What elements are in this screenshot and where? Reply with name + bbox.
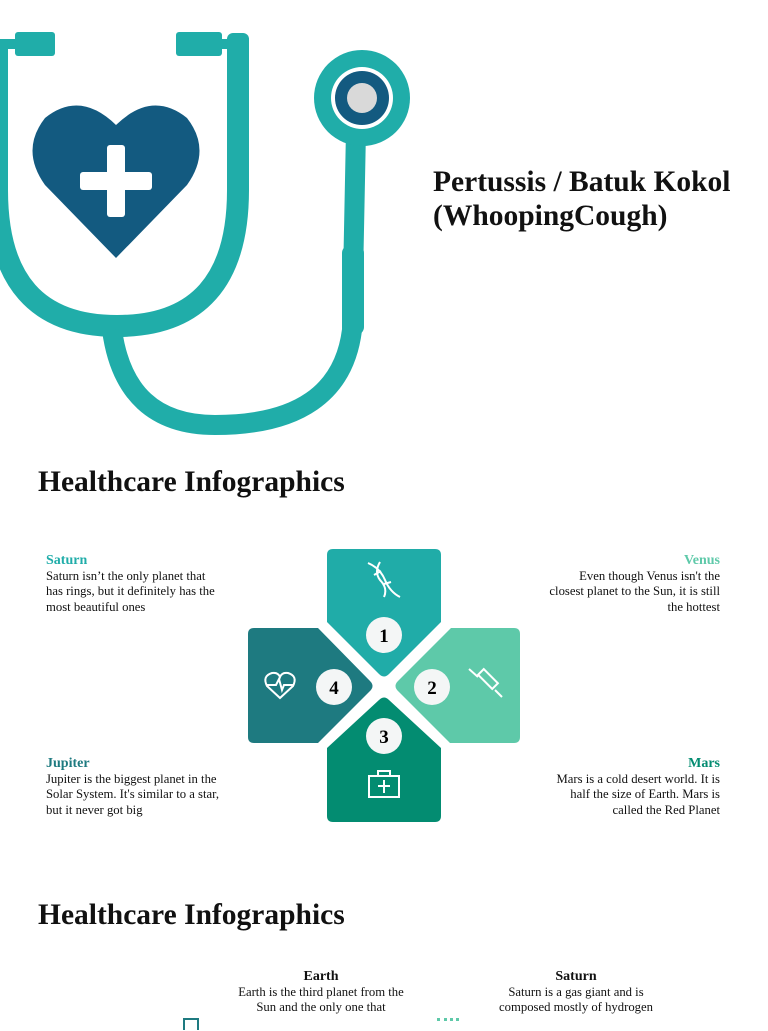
- text block: Saturn 2: Saturn: [555, 969, 597, 984]
- tile 3: 3: [379, 727, 389, 748]
- tile 4: [248, 628, 372, 743]
- text block: Mars: Mars is a cold desert world. It is: [556, 772, 720, 786]
- text block: Venus: Venus: [684, 553, 720, 568]
- text block: Jupiter: Solar System. It's similar to a star,: [46, 787, 219, 801]
- icon: partial right: [437, 1018, 459, 1031]
- text block: Earth: Earth is the third planet from the: [238, 984, 404, 998]
- text block: Mars: half the size of Earth. Mars is: [570, 787, 720, 801]
- text block: Saturn 2: [499, 969, 653, 1014]
- title: Pertussis / Batuk Kokol: [433, 166, 731, 198]
- diagram: four-part cross: [248, 549, 520, 822]
- icon: partial left: [183, 1018, 199, 1030]
- text block: Saturn: Saturn: [46, 553, 87, 568]
- tile 3: [327, 698, 441, 822]
- text block: Jupiter: Jupiter: [46, 756, 90, 771]
- text block: Saturn: Saturn isn’t the only planet that: [46, 568, 205, 582]
- heading 2: Healthcare Infographics: [38, 899, 345, 931]
- text block: Earth: Sun and the only one that: [256, 1000, 386, 1014]
- title: [433, 166, 731, 232]
- text block: Jupiter: Jupiter is the biggest planet in the: [46, 772, 217, 786]
- title: (WhoopingCough): [433, 200, 667, 232]
- text block: Saturn: has rings, but it definitely has the: [46, 584, 215, 598]
- text block: Jupiter: but it never got big: [46, 802, 143, 816]
- text block: Venus: the hottest: [667, 600, 720, 614]
- text block: Venus: Even though Venus isn't the: [579, 568, 720, 582]
- text block: Mars: Mars: [688, 756, 720, 771]
- tile 2: 2: [427, 678, 437, 699]
- illustration: stethoscope with heart: [0, 32, 410, 435]
- text block: Mars: called the Red Planet: [613, 802, 720, 816]
- text block: Jupiter: [46, 756, 219, 816]
- text block: Earth: [238, 969, 404, 1014]
- heading 1: Healthcare Infographics: [38, 466, 345, 498]
- tile 1: 1: [379, 626, 389, 647]
- text block: Earth: Earth: [304, 969, 338, 984]
- text block: Venus: [549, 553, 720, 614]
- tile 1: [327, 549, 441, 676]
- text block: Saturn: most beautiful ones: [46, 600, 145, 614]
- text block: Saturn: [46, 553, 215, 614]
- text block: Venus: closest planet to the Sun, it is still: [549, 584, 720, 598]
- tile 2: [396, 628, 520, 743]
- text block: Saturn 2: Saturn is a gas giant and is: [508, 984, 644, 998]
- text block: Saturn 2: composed mostly of hydrogen: [499, 1000, 653, 1014]
- tile 4: 4: [329, 678, 339, 699]
- text block: Mars: [556, 756, 720, 816]
